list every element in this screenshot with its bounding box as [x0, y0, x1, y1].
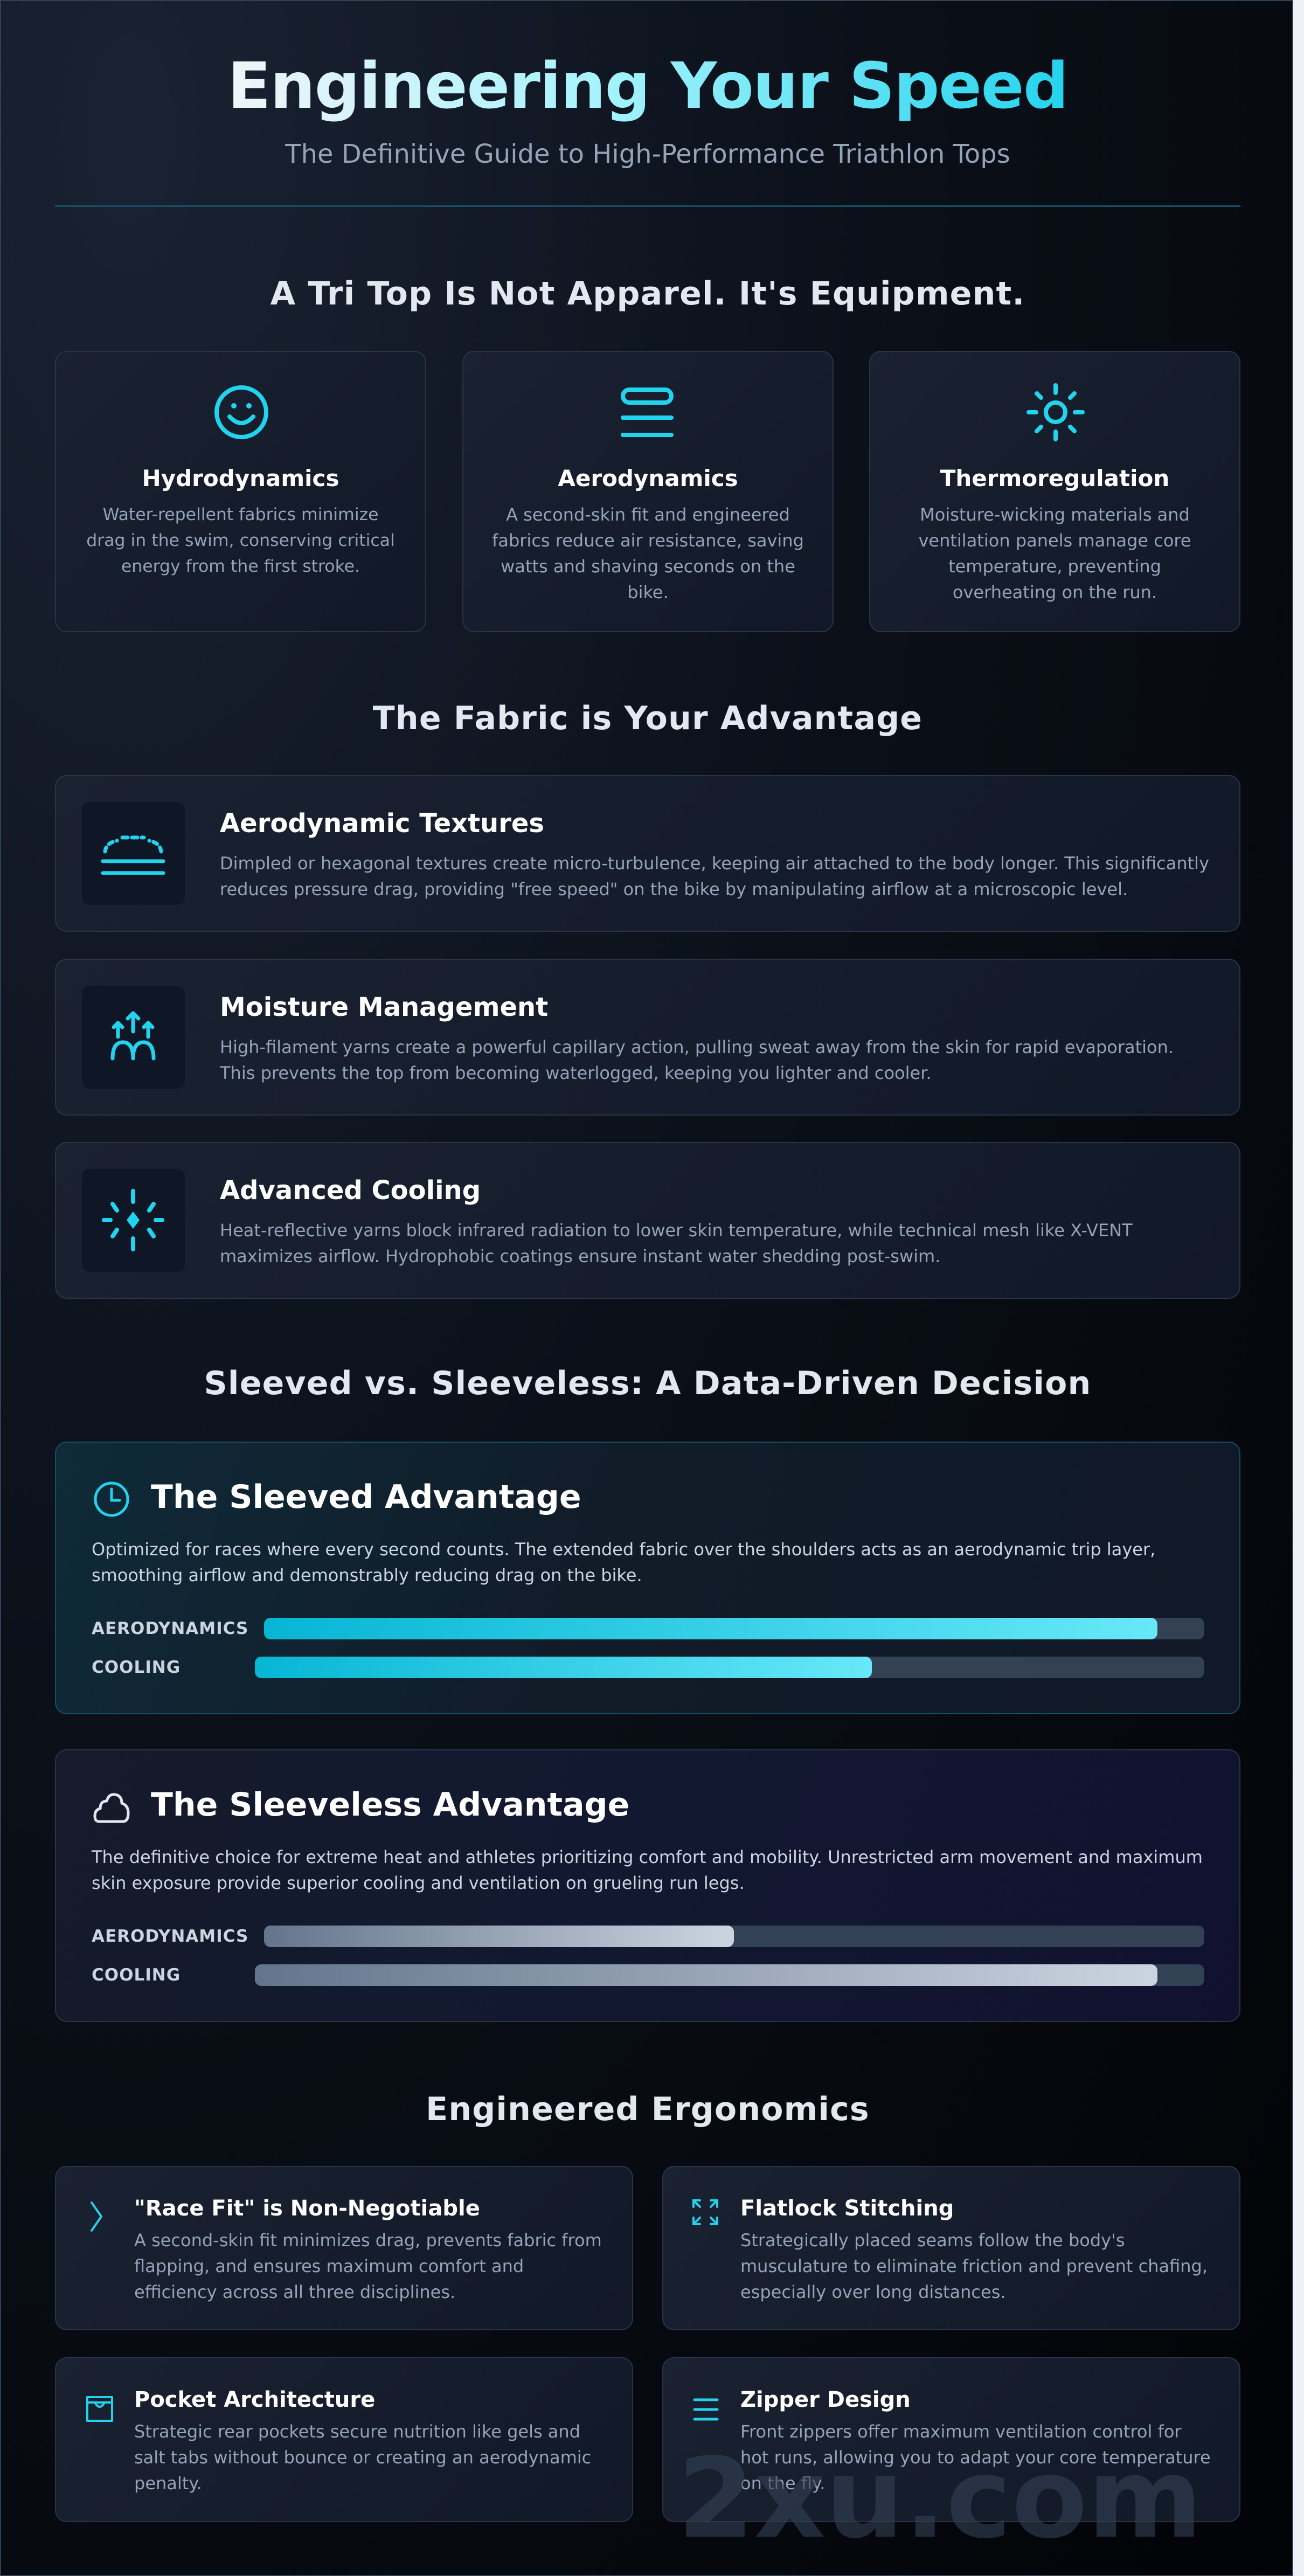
panel: race fit — [55, 2166, 633, 2330]
icon: stacked bars — [621, 387, 674, 437]
bar chart: sleeveless: AERODYNAMICS — [92, 1927, 248, 1946]
icon: cooling — [82, 1169, 185, 1272]
card text: Dimpled or hexagonal textures create micro-turbulence, keeping air attached to the body longer. This significantly reduces pressure drag, providing "free speed" on the bike by manipulating airflow at a microscopic level. — [220, 853, 1209, 899]
bar chart: sleeveless — [92, 1926, 1204, 1986]
icon: chevron — [91, 2201, 102, 2232]
card text: Water-repellent fabrics minimize drag in the swim, conserving critical energy from the first stroke. — [86, 505, 395, 576]
card title: Flatlock Stitching — [740, 2196, 954, 2221]
panel title: The Sleeved Advantage — [151, 1478, 581, 1516]
icon: textures — [82, 802, 185, 905]
card text: A second-skin fit and engineered fabrics reduce air resistance, saving watts and shaving seconds on the bike. — [492, 504, 804, 603]
card title: Moisture Management — [220, 992, 548, 1022]
card title: "Race Fit" is Non-Negotiable — [134, 2196, 480, 2221]
card title: Aerodynamic Textures — [220, 808, 544, 839]
icon: pocket — [86, 2396, 113, 2422]
card text: High-filament yarns create a powerful capillary action, pulling sweat away from the skin for rapid evaporation. This prevents the top from becoming waterlogged, keeping you lighter and cooler. — [220, 1037, 1174, 1083]
panel: moisture management — [55, 959, 1240, 1116]
card title: Pocket Architecture — [134, 2387, 375, 2412]
card text: Front zippers offer maximum ventilation control for hot runs, allowing you to adapt your core temperature on the fly. — [740, 2421, 1211, 2494]
panel: thermoregulation — [869, 351, 1240, 632]
card text: Moisture-wicking materials and ventilation panels manage core temperature, preventing overheating on the run. — [918, 504, 1191, 603]
card text: Strategically placed seams follow the body's musculature to eliminate friction and prevent chafing, especially over long distances. — [740, 2230, 1208, 2302]
icon: arrows — [692, 2199, 719, 2226]
watermark: 2xu.com — [677, 2435, 1203, 2563]
icon: wicking arrows — [82, 986, 185, 1089]
card title: Aerodynamics — [558, 465, 738, 491]
icon: clock — [94, 1482, 129, 1516]
subtitle: The Definitive Guide to High-Performance Triathlon Tops — [285, 139, 1010, 169]
panel: sleeveless advantage — [55, 1749, 1240, 2022]
card text: A second-skin fit minimizes drag, prevents fabric from flapping, and ensures maximum comfort and efficiency across all three disciplines. — [134, 2230, 602, 2302]
panel: hydrodynamics — [55, 351, 426, 632]
card title: Hydrodynamics — [142, 465, 339, 491]
heading: sleeved vs sleeveless: Sleeved vs. Sleeveless: A Data-Driven Decision — [204, 1365, 1091, 1402]
card title: Zipper Design — [740, 2387, 911, 2412]
title: Engineering Your Speed — [227, 49, 1068, 123]
icon: cloud — [94, 1793, 129, 1823]
card title: Advanced Cooling — [220, 1175, 481, 1206]
card text: Heat-reflective yarns block infrared radiation to lower skin temperature, while technical mesh like X-VENT maximizes airflow. Hydrophobic coatings ensure instant water shedding post-swim. — [220, 1220, 1133, 1266]
panel: advanced cooling — [55, 1142, 1240, 1299]
bar chart: sleeved: AERODYNAMICS — [92, 1619, 248, 1638]
panel: sleeved advantage — [55, 1442, 1240, 1714]
bar chart: sleeved — [92, 1618, 1204, 1678]
icon: smile — [214, 385, 268, 439]
card text: Strategic rear pockets secure nutrition like gels and salt tabs without bounce or creating an aerodynamic penalty. — [134, 2421, 591, 2494]
heading: fabric: The Fabric is Your Advantage — [373, 700, 922, 737]
heading: ergonomics: Engineered Ergonomics — [426, 2090, 870, 2128]
panel: pocket architecture — [55, 2357, 633, 2522]
panel text: The definitive choice for extreme heat and athletes prioritizing comfort and mobility. Unrestricted arm movement and maximum skin exposure provide superior cooling and ventilation on grueling run legs. — [92, 1847, 1203, 1893]
heading: tri top: A Tri Top Is Not Apparel. It's Equipment. — [270, 275, 1025, 313]
panel: aerodynamic textures — [55, 775, 1240, 932]
panel: aerodynamics — [462, 351, 834, 632]
bar chart: sleeved: COOLING — [92, 1658, 181, 1677]
icon: sun — [1026, 383, 1085, 441]
panel: zipper design — [662, 2357, 1240, 2522]
panel title: The Sleeveless Advantage — [151, 1786, 629, 1824]
bar chart: sleeveless: COOLING — [92, 1965, 181, 1985]
panel text: Optimized for races where every second counts. The extended fabric over the shoulders acts as an aerodynamic trip layer, smoothing airflow and demonstrably reducing drag on the bike. — [92, 1539, 1155, 1585]
card title: Thermoregulation — [940, 465, 1169, 491]
icon: lines — [693, 2398, 719, 2421]
panel: flatlock stitching — [662, 2166, 1240, 2330]
